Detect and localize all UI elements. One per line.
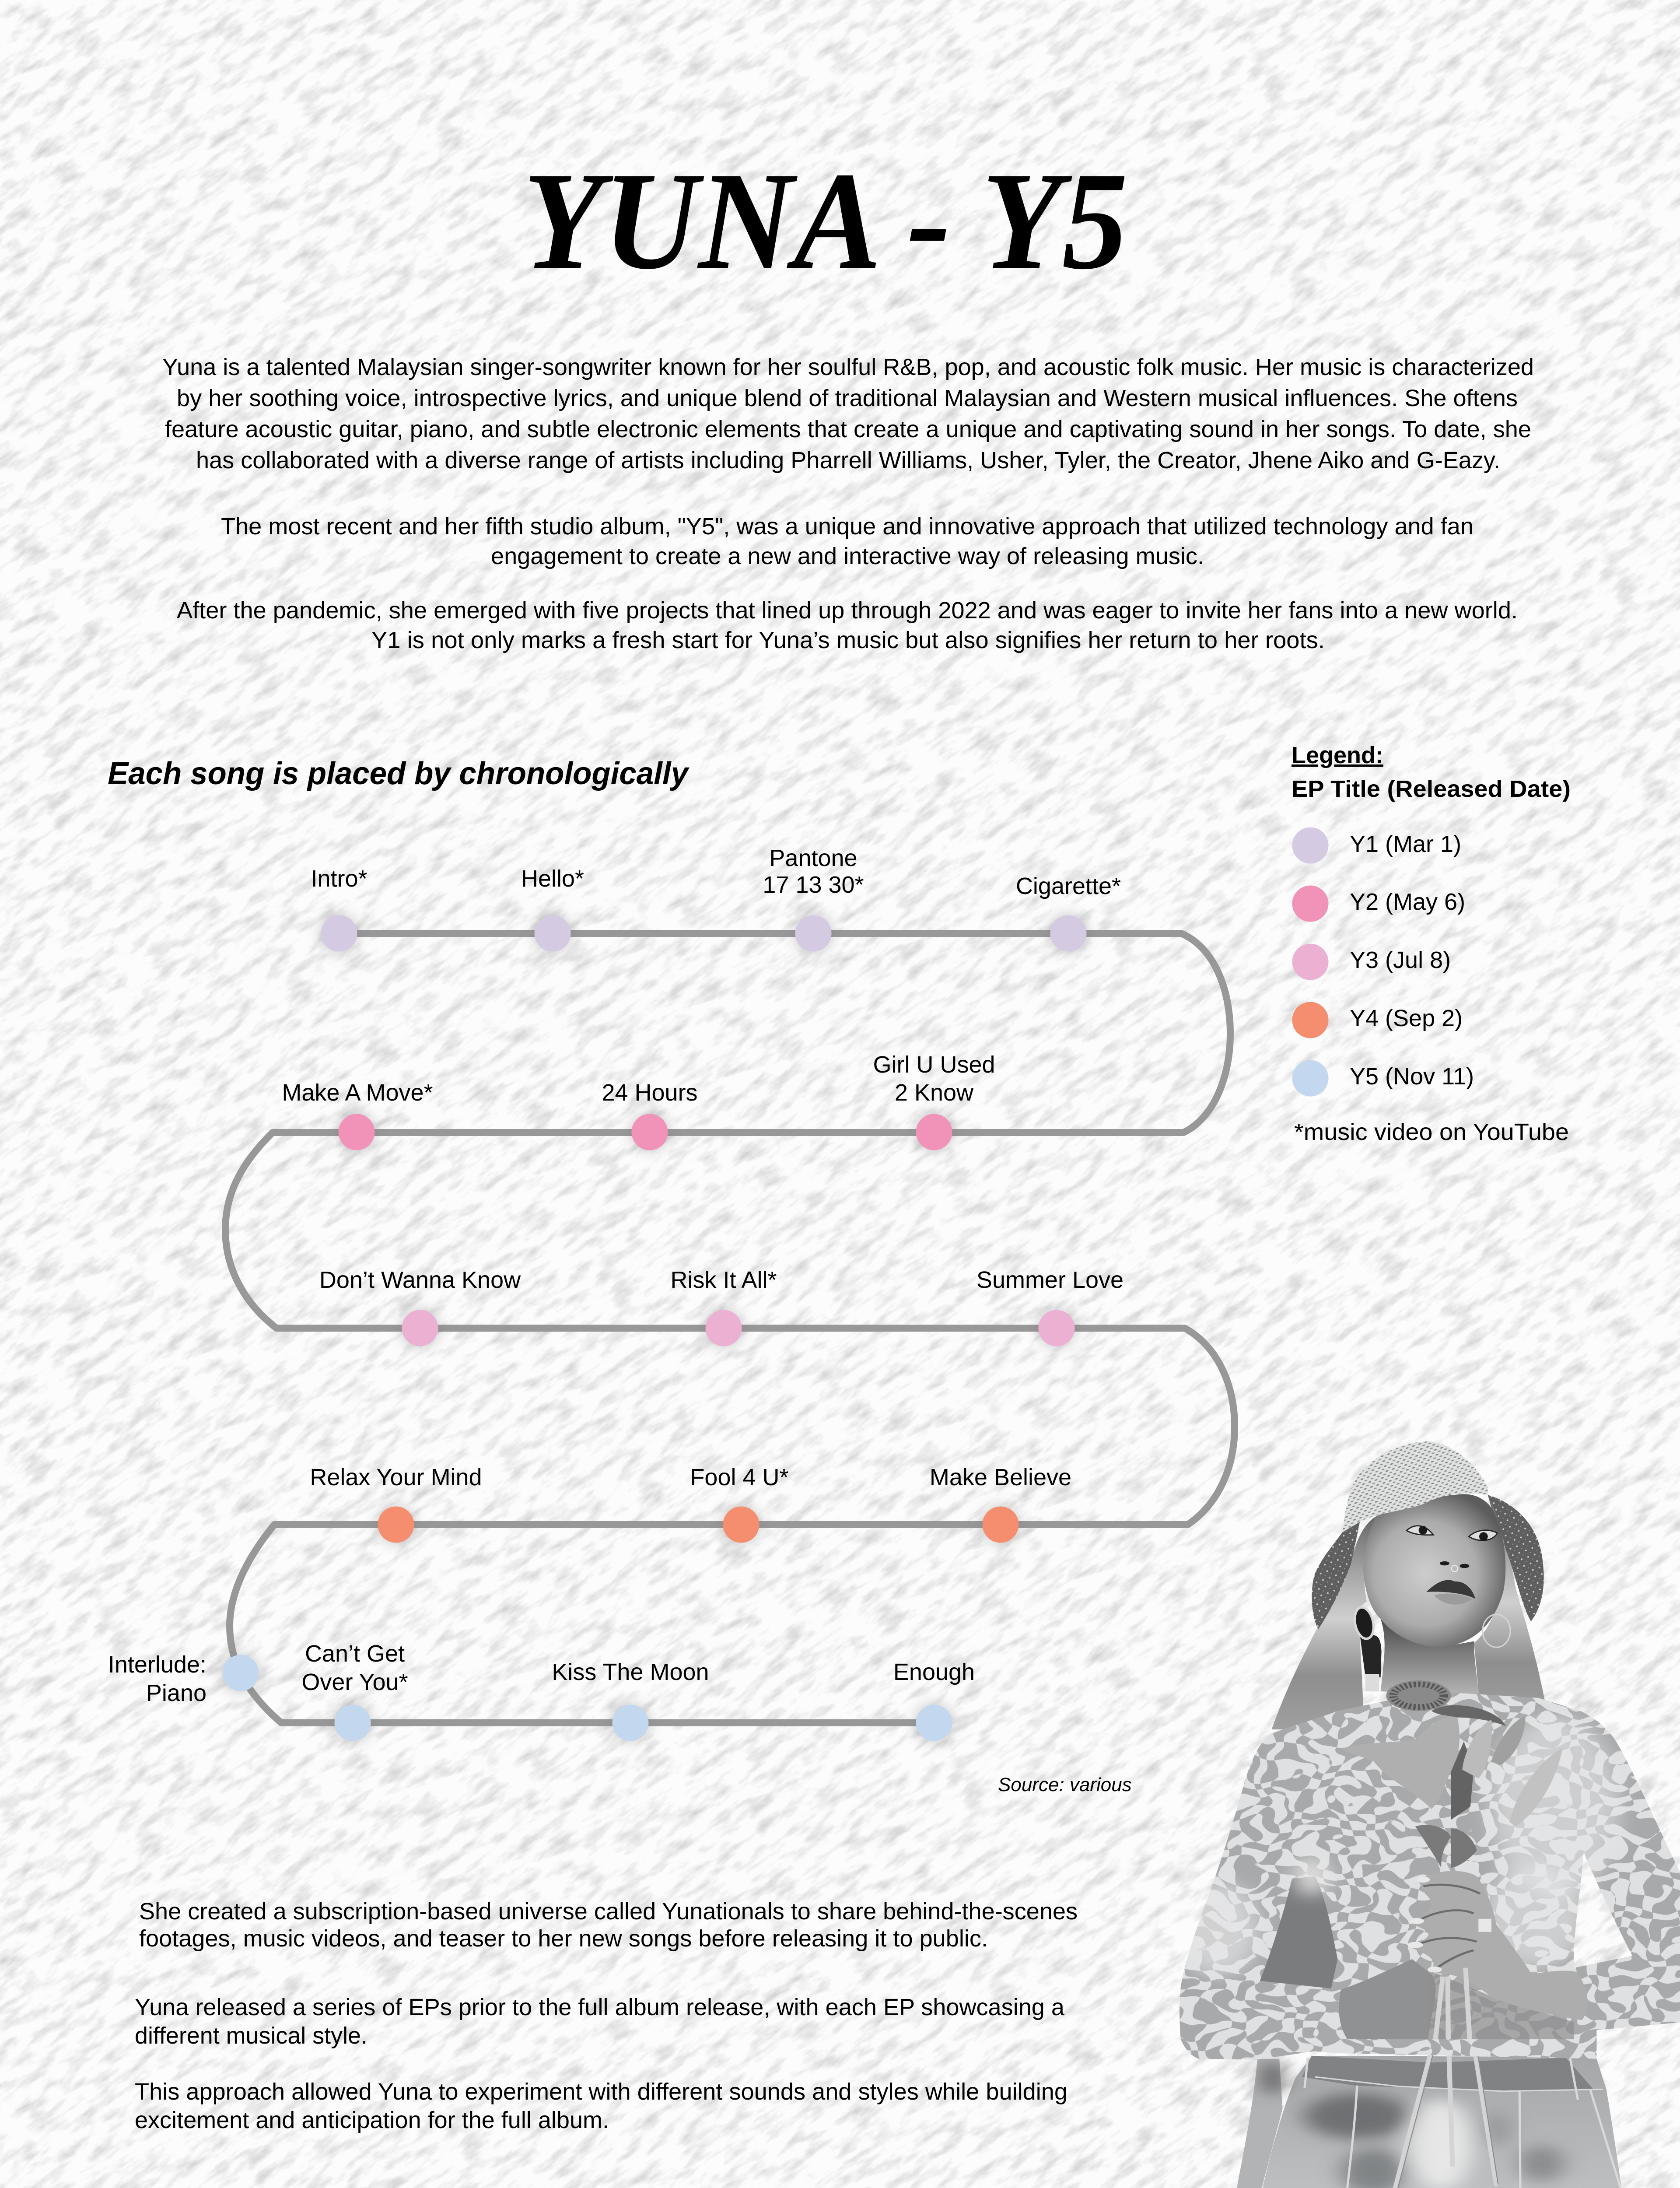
Y4 songs: Relax Your Mind xyxy=(310,1464,482,1490)
Y5 songs: Over You* xyxy=(301,1669,408,1695)
flower heads xyxy=(1432,1705,1506,1726)
intro text block: feature acoustic guitar, piano, and subtle electronic elements that create a unique and captivating sound in her songs. To date, she xyxy=(165,416,1531,442)
Y3 songs: Summer Love xyxy=(976,1267,1124,1293)
Y5 songs: Interlude: xyxy=(108,1652,206,1678)
legend item: Y3: Y3 (Jul 8) xyxy=(1350,947,1451,973)
drape xyxy=(1233,2059,1283,2188)
intro text block: Y1 is not only marks a fresh start for Yuna’s music but also signifies her return to her roots. xyxy=(371,627,1325,653)
Y5 songs: Enough xyxy=(893,1659,975,1685)
hat crown xyxy=(1343,1441,1488,1532)
legend item: Y4: Y4 (Sep 2) xyxy=(1350,1005,1463,1031)
legend xyxy=(1292,742,1571,1145)
Y4 songs: Fool 4 U* xyxy=(690,1464,789,1490)
intro text block: has collaborated with a diverse range of artists including Pharrell Williams, Usher, Tyler, the Creator, Jhene Aiko and G-Eazy. xyxy=(196,447,1500,473)
gap between arm and torso xyxy=(1260,1876,1337,1988)
legend item: Y5 xyxy=(1292,1060,1474,1097)
Y2 songs: 24 Hours xyxy=(602,1080,698,1106)
legend item: Y1 xyxy=(1292,827,1461,864)
stems xyxy=(1393,2013,1496,2188)
source note: Source: various xyxy=(998,1774,1132,1795)
legend item: Y1: Y1 (Mar 1) xyxy=(1350,831,1461,857)
Y3 songs: Don’t Wanna Know xyxy=(319,1267,521,1293)
title: YUNA - Y5 xyxy=(523,144,1128,298)
chart heading: Each song is placed by chronologically xyxy=(108,756,690,791)
neck xyxy=(1381,1619,1479,1695)
hat brim xyxy=(1488,1495,1544,1621)
Y5 songs: Kiss The Moon xyxy=(552,1659,709,1685)
legend: Legend: xyxy=(1292,742,1383,768)
Y1 songs: Cigarette* xyxy=(1016,873,1121,899)
bottom text block: Yuna released a series of EPs prior to the full album release, with each EP showcasing a xyxy=(135,1994,1065,2020)
bottom text block: footages, music videos, and teaser to her new songs before releasing it to public. xyxy=(139,1925,988,1952)
intro text block xyxy=(162,354,1534,653)
Y1 songs: 17 13 30* xyxy=(763,872,864,898)
bottom text block: She created a subscription-based universe called Yunationals to share behind-the-scenes xyxy=(139,1898,1078,1925)
face xyxy=(1363,1494,1505,1647)
legend item: Y4 xyxy=(1292,1002,1463,1038)
legend item: Y3 xyxy=(1292,943,1451,980)
Y3 songs xyxy=(319,1267,1124,1346)
bouquet xyxy=(1341,1680,1563,1868)
legend: EP Title (Released Date) xyxy=(1292,776,1571,802)
Y5 songs: Can’t Get xyxy=(305,1641,405,1667)
timeline road xyxy=(225,933,1235,1723)
Y2 songs: Make A Move* xyxy=(282,1080,433,1106)
hair xyxy=(1272,1517,1376,1729)
intro text block: engagement to create a new and interactive way of releasing music. xyxy=(491,543,1204,569)
Y2 songs: Girl U Used xyxy=(873,1052,995,1078)
intro text block: The most recent and her fifth studio album, "Y5", was a unique and innovative approach that utilized technology and fan xyxy=(221,513,1474,540)
intro text block: Yuna is a talented Malaysian singer-songwriter known for her soulful R&B, pop, and acoustic folk music. Her music is characterized xyxy=(162,354,1534,380)
Y1 songs: Hello* xyxy=(521,866,584,892)
rings and nails xyxy=(1407,1876,1491,1973)
lips xyxy=(1426,1580,1475,1599)
legend item: Y2 xyxy=(1292,886,1465,922)
clasped fingers xyxy=(1412,1871,1588,2020)
jeans shading xyxy=(1262,2061,1564,2188)
eyes xyxy=(1407,1526,1433,1535)
Y3 songs: Risk It All* xyxy=(670,1267,777,1293)
photo: Yuna holding flowers xyxy=(1153,1441,1680,2188)
bottom text block: different musical style. xyxy=(135,2023,368,2049)
jeans body xyxy=(1245,2056,1636,2188)
shirt, arms and bouquet xyxy=(1153,1680,1680,2072)
Y5 songs: Piano xyxy=(146,1680,206,1706)
Y1 songs: Intro* xyxy=(311,866,368,892)
Y4 songs xyxy=(310,1464,1071,1543)
hat and head xyxy=(1272,1441,1548,1729)
waistband xyxy=(1302,2056,1593,2091)
legend item: Y2: Y2 (May 6) xyxy=(1350,889,1465,915)
legend note: *music video on YouTube xyxy=(1294,1119,1569,1145)
Y4 songs: Make Believe xyxy=(930,1464,1071,1490)
earrings xyxy=(1352,1606,1376,1641)
Y2 songs: 2 Know xyxy=(895,1080,974,1106)
seams xyxy=(1305,2058,1623,2188)
stems over shirt xyxy=(1435,1968,1470,2039)
bottom text block xyxy=(135,1898,1078,2133)
Y2 songs xyxy=(282,1052,995,1150)
legend item: Y5: Y5 (Nov 11) xyxy=(1350,1063,1474,1090)
intro text block: After the pandemic, she emerged with five projects that lined up through 2022 and was eager to invite her fans into a new world. xyxy=(177,597,1518,624)
bottom text block: excitement and anticipation for the full album. xyxy=(135,2107,609,2133)
lily xyxy=(1341,1717,1460,1809)
jeans and drape xyxy=(1233,2013,1636,2188)
timeline chart xyxy=(108,845,1235,1742)
nose xyxy=(1440,1561,1449,1565)
dot shadows xyxy=(221,914,1088,1742)
intro text block: by her soothing voice, introspective lyrics, and unique blend of traditional Malaysian and Western musical influences. She oftens xyxy=(177,385,1518,411)
Y1 songs xyxy=(311,845,1121,951)
Y5 songs xyxy=(108,1641,975,1741)
Y1 songs: Pantone xyxy=(769,845,858,871)
stem cluster xyxy=(1451,1741,1474,1820)
bottom text block: This approach allowed Yuna to experiment with different sounds and styles while building xyxy=(135,2079,1068,2105)
chest below hands xyxy=(1428,1970,1574,2039)
leaves xyxy=(1415,1825,1451,1868)
left hand xyxy=(1339,1959,1436,2039)
